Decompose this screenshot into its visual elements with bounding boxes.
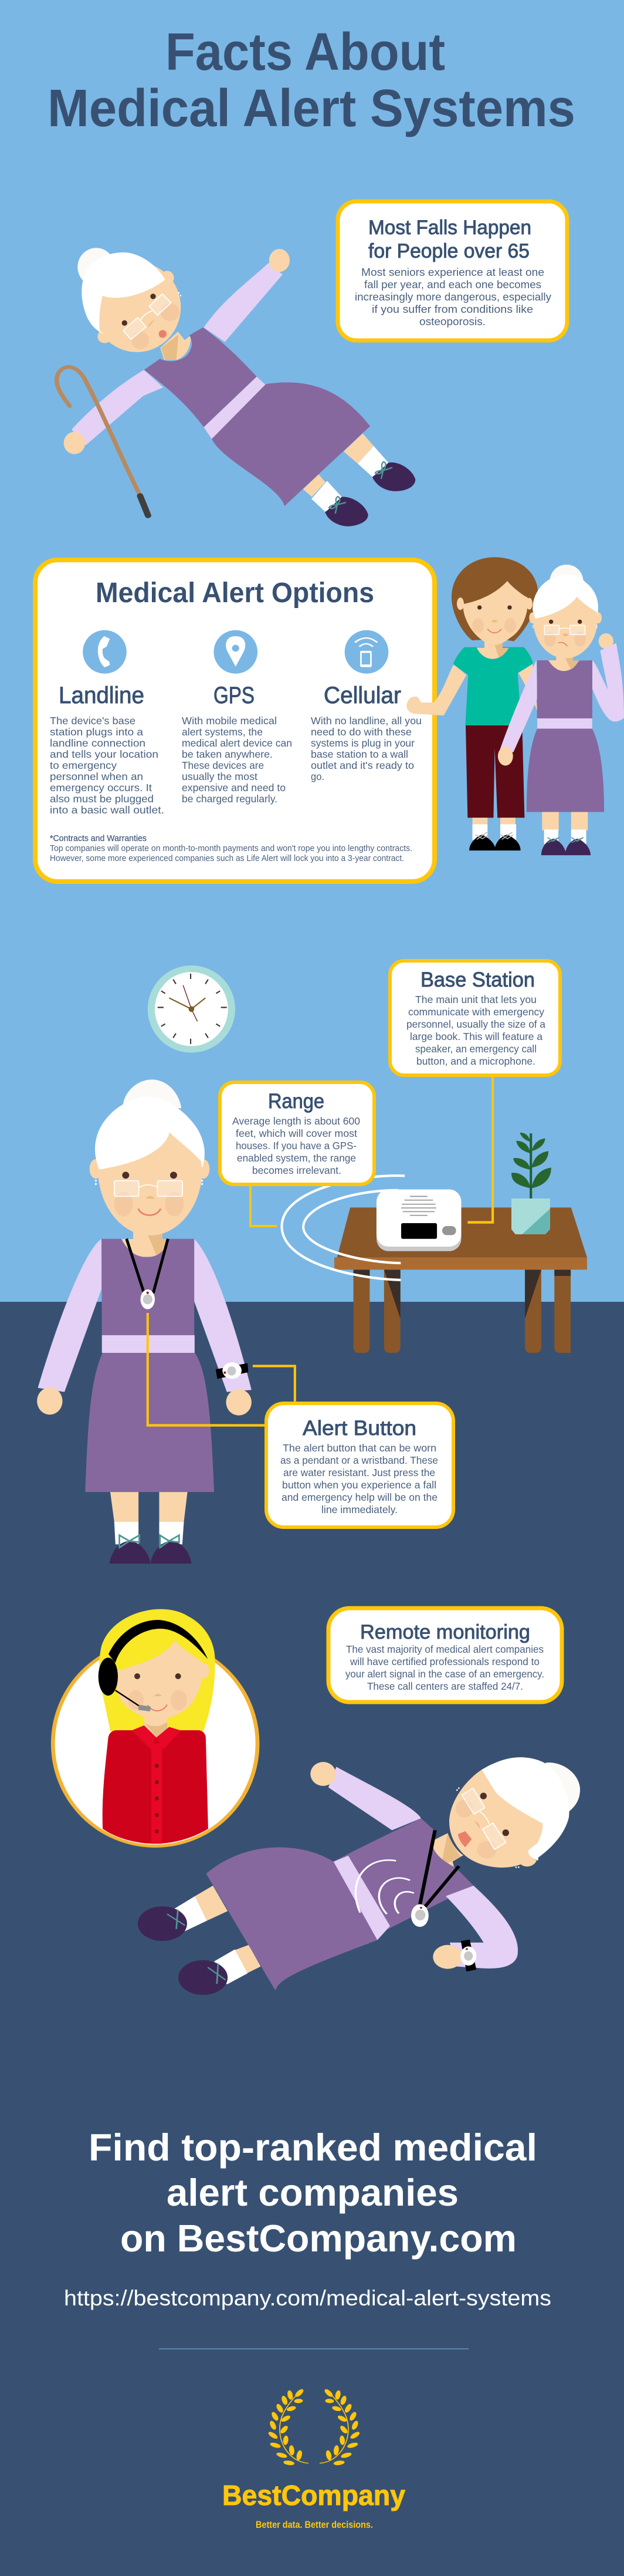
callout: remote monitoring: Remote monitoring — [360, 1621, 530, 1643]
footnote: contracts and warranties — [50, 833, 412, 863]
icon: laurel wreath — [267, 2388, 361, 2466]
callout: alert button: are water resistant. Just press the — [283, 1467, 435, 1478]
connector: alert button — [148, 1313, 295, 1425]
callout: range: enabled system, the range — [237, 1152, 356, 1164]
logo: best company: BestCompany — [222, 2480, 405, 2511]
column: gps: be taken anywhere. — [182, 748, 273, 760]
callout: remote monitoring: your alert signal in the case of an emergency. — [345, 1668, 544, 1680]
column: cellular: outlet and it's ready to — [311, 759, 414, 771]
title: Facts About — [165, 23, 445, 82]
column: cellular: go. — [311, 771, 324, 782]
callout: alert button: as a pendant or a wristband. These — [280, 1454, 438, 1466]
callout: remote monitoring — [328, 1608, 562, 1702]
column: landline: and tells your location — [50, 748, 158, 760]
url: https://bestcompany.com/medical-alert-systems — [64, 2286, 551, 2310]
illustration: daughter and grandmother — [406, 557, 624, 855]
callout: alert button: button when you experience a fall — [282, 1479, 436, 1491]
illustration: falling grandmother with cane — [57, 248, 415, 526]
callout: most falls happen: if you suffer from conditions like — [372, 303, 533, 315]
panel: medical alert options — [35, 560, 435, 882]
callout: base station: The main unit that lets you — [415, 994, 537, 1005]
illustration: standing grandmother with pendant and wristband — [37, 1079, 295, 1564]
falling feet — [303, 433, 415, 526]
callout: base station: large book. This will feature a — [410, 1031, 542, 1042]
callout: alert button: The alert button that can be worn — [283, 1442, 436, 1454]
icon: cane — [57, 367, 148, 515]
callout: most falls happen: fall per year, and each one becomes — [364, 279, 541, 291]
callout: range: Range — [268, 1089, 324, 1113]
column: gps: These devices are — [182, 759, 264, 771]
icon: gps pin — [213, 630, 257, 674]
title: Medical Alert Systems — [48, 79, 575, 138]
column: cellular: With no landline, all you — [311, 715, 422, 727]
column: gps: GPS — [213, 683, 255, 708]
fallen head — [428, 1757, 580, 1868]
column: landline: into a basic wall outlet. — [50, 804, 164, 816]
call to action: Find top-ranked medical — [89, 2126, 537, 2169]
base station device — [377, 1190, 461, 1251]
callout: range: houses. If you have a GPS- — [236, 1140, 357, 1152]
grandmother figure — [498, 565, 624, 855]
standing head — [90, 1079, 209, 1257]
callout: most falls happen: for People over 65 — [368, 240, 530, 262]
column: cellular — [311, 683, 422, 782]
callout: alert button: line immediately. — [321, 1504, 398, 1515]
callout: base station: speaker, an emergency call — [415, 1043, 537, 1055]
falling dress — [144, 328, 370, 506]
callout: base station: Base Station — [420, 968, 535, 991]
column: landline: personnel when an — [50, 771, 143, 782]
column: gps: be charged regularly. — [182, 793, 277, 805]
column: landline: Landline — [59, 683, 144, 708]
call to action: on BestCompany.com — [120, 2217, 517, 2260]
column: landline — [50, 683, 164, 816]
callout: base station: communicate with emergency — [408, 1006, 544, 1018]
column: gps: expensive and need to — [182, 782, 286, 794]
illustration: fallen grandmother — [138, 1757, 580, 1995]
illustration: wall clock — [148, 965, 235, 1053]
column: gps — [182, 683, 292, 805]
column: cellular: need to do with these — [311, 726, 412, 738]
footnote: contracts and warranties: Top companies will operate on month-to-month payments and won't rope you into lengthy contracts. — [50, 844, 412, 853]
connector: range — [250, 1186, 277, 1226]
icon: pendant — [411, 1830, 459, 1927]
column: landline: emergency occurs. It — [50, 782, 152, 794]
column: gps: medical alert device can — [182, 737, 292, 749]
footnote: contracts and warranties: *Contracts and Warranties — [50, 833, 147, 843]
icon: headset — [99, 1620, 208, 1711]
icon: cellular device — [345, 630, 388, 674]
callout: most falls happen: osteoporosis. — [419, 316, 486, 328]
connector: base station — [467, 1077, 493, 1223]
column: landline: to emergency — [50, 759, 117, 771]
call to action: alert companies — [167, 2171, 459, 2214]
icon: landline phone — [83, 630, 127, 674]
icon: wristband — [216, 1362, 248, 1379]
callout: most falls happen: Most seniors experience at least one — [361, 266, 544, 278]
column: cellular: base station to a wall — [311, 748, 408, 760]
callout: base station — [390, 961, 560, 1075]
signal arcs — [282, 1176, 405, 1280]
column: gps: With mobile medical — [182, 715, 277, 727]
callout: most falls happen: Most Falls Happen — [368, 217, 531, 239]
callout: most falls happen — [338, 201, 567, 340]
callout: range: becomes irrelevant. — [252, 1164, 341, 1176]
column: gps: usually the most — [182, 771, 257, 782]
operator head — [99, 1609, 215, 1737]
callout: base station: button, and a microphone. — [416, 1055, 535, 1067]
icon: signal arcs — [355, 1860, 414, 1914]
column: gps: alert systems, the — [182, 726, 263, 738]
plant in pot — [511, 1133, 551, 1234]
column: landline: station plugs into a — [50, 726, 143, 738]
title — [48, 23, 575, 138]
callout: most falls happen: increasingly more dangerous, especially — [355, 291, 551, 303]
heading: medical alert options: Medical Alert Options — [96, 578, 374, 609]
callout: remote monitoring: will have certified professionals respond to — [350, 1656, 540, 1667]
column: landline: The device's base — [50, 715, 135, 727]
column: landline: also must be plugged — [50, 793, 154, 805]
callout: alert button — [266, 1403, 453, 1527]
callout: remote monitoring: These call centers are staffed 24/7. — [367, 1680, 523, 1692]
logo: best company — [222, 2480, 405, 2530]
illustration: table with base station and plant — [282, 1077, 587, 1353]
callout: alert button: Alert Button — [303, 1416, 416, 1440]
callout: range — [220, 1082, 374, 1184]
logo: best company: Better data. Better decisions. — [256, 2519, 373, 2530]
callout: base station: personnel, usually the size of a — [406, 1018, 545, 1030]
column: cellular: systems is plug in your — [311, 737, 415, 749]
illustration: call center operator in circle — [53, 1609, 257, 1846]
falling head — [77, 248, 191, 360]
icon: wristband — [460, 1940, 476, 1971]
footnote: contracts and warranties: However, some more experienced companies such as Life Alert will lock you into a 3-year contract. — [50, 854, 404, 863]
column: cellular: Cellular — [324, 683, 401, 708]
callout: remote monitoring: The vast majority of medical alert companies — [346, 1643, 544, 1655]
daughter figure — [406, 557, 538, 850]
callout: range: Average length is about 600 — [232, 1115, 360, 1127]
icon: pendant — [127, 1239, 168, 1309]
call to action — [89, 2126, 537, 2260]
callout: range: feet, which will cover most — [236, 1127, 357, 1139]
callout: alert button: and emergency help will be on the — [282, 1491, 438, 1503]
column: landline: landline connection — [50, 737, 145, 749]
table — [334, 1207, 587, 1353]
